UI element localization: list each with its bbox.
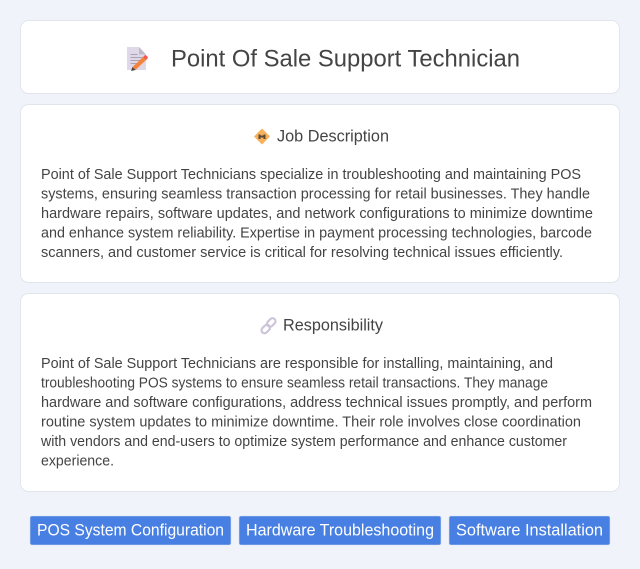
icon: diamond road sign — [255, 130, 269, 144]
heading: responsibility: Responsibility — [283, 316, 384, 334]
text block: responsibility: experience. — [41, 454, 114, 470]
panel: title header — [20, 20, 620, 94]
tag: POS System Configuration — [30, 516, 231, 545]
tag: POS System Configuration: POS System Configuration — [37, 520, 224, 540]
text block: responsibility: with vendors and end-users to optimize system performance and enhance customer — [40, 434, 567, 450]
text block: job description: systems, ensuring seamless transaction processing for retail businesses. They handle — [41, 186, 590, 202]
text block: job description: hardware repairs, software updates, and network configurations to minimize downtime — [41, 206, 593, 222]
text block: responsibility: troubleshooting POS systems to ensure seamless retail transactions. They manage — [41, 376, 548, 392]
heading: job description: Job Description — [277, 128, 389, 146]
text block: responsibility — [40, 356, 592, 470]
icon: document with pencil — [127, 47, 148, 71]
tag: Software Installation — [449, 516, 610, 545]
icon: chain link — [260, 317, 277, 334]
text block: job description: Point of Sale Support Technicians specialize in troubleshooting and maintaining POS — [41, 167, 581, 183]
title: Point Of Sale Support Technician — [171, 46, 520, 72]
text block: responsibility: Point of Sale Support Technicians are responsible for installing, maintaining, and — [41, 356, 553, 372]
text block: job description: and enhance system reliability. Expertise in payment processing technologies, barcode — [41, 226, 592, 242]
tag: Software Installation: Software Installation — [456, 520, 603, 540]
panel: responsibility — [20, 294, 620, 492]
panel: job description — [20, 104, 620, 282]
tag: Hardware Troubleshooting: Hardware Troubleshooting — [246, 520, 434, 540]
text block: responsibility: hardware and software configurations, address technical issues promptly, and perform — [41, 395, 592, 411]
text block: job description — [41, 167, 593, 261]
text block: job description: scanners, and customer service is critical for resolving technical issues efficiently. — [41, 245, 563, 261]
tag: Hardware Troubleshooting — [239, 516, 441, 545]
text block: responsibility: routine system updates to minimize downtime. Their role involves close coordination — [41, 414, 581, 430]
